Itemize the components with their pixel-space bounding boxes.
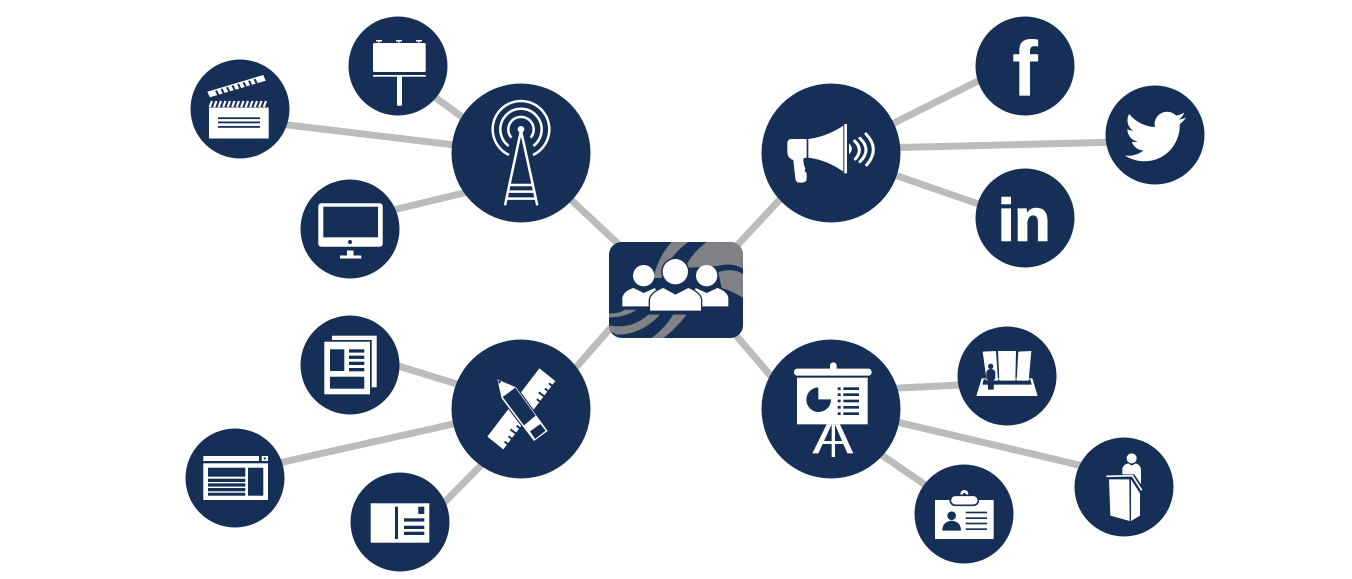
icon: postcard — [371, 503, 429, 543]
connector lines — [270, 75, 1120, 517]
icon: group of three people — [622, 259, 728, 311]
mind map diagram — [186, 16, 1204, 572]
node: newspaper — [300, 316, 400, 414]
node: web page — [186, 428, 284, 528]
icon: ruler and pencil — [487, 368, 555, 449]
node: monitor — [300, 180, 400, 278]
node: facebook — [976, 16, 1074, 116]
node: twitter — [1106, 86, 1204, 184]
icon: exhibit booth with figure — [976, 351, 1038, 396]
icon: facebook letter: f — [1012, 25, 1039, 113]
icon: linkedin letters: in — [998, 187, 1050, 253]
node: exhibit stage — [958, 326, 1056, 426]
icon: billboard — [373, 40, 426, 106]
icon: desktop monitor — [318, 203, 383, 258]
icon: twitter bird — [1125, 112, 1186, 161]
node: linkedin — [976, 168, 1074, 268]
icon: newspaper pages — [324, 336, 377, 394]
node: presentation — [762, 340, 900, 478]
node: design tools — [452, 340, 590, 478]
icon: clapperboard — [207, 75, 269, 138]
icon: megaphone with sound waves — [787, 124, 873, 183]
node: name badge — [914, 464, 1014, 564]
icon: speaker at podium — [1106, 453, 1142, 521]
icon: radio tower — [493, 101, 549, 205]
icon: presentation board — [794, 362, 872, 457]
node: billboard — [348, 16, 448, 116]
node: clapperboard — [190, 60, 290, 158]
node: postcard — [350, 472, 450, 572]
center card: audience — [609, 242, 743, 338]
node: megaphone — [762, 84, 900, 222]
icon: id badge — [935, 490, 994, 539]
decorative swooshes — [609, 242, 743, 338]
node: broadcast tower — [452, 84, 590, 222]
icon: browser window — [203, 456, 268, 500]
node: podium speaker — [1074, 438, 1174, 536]
